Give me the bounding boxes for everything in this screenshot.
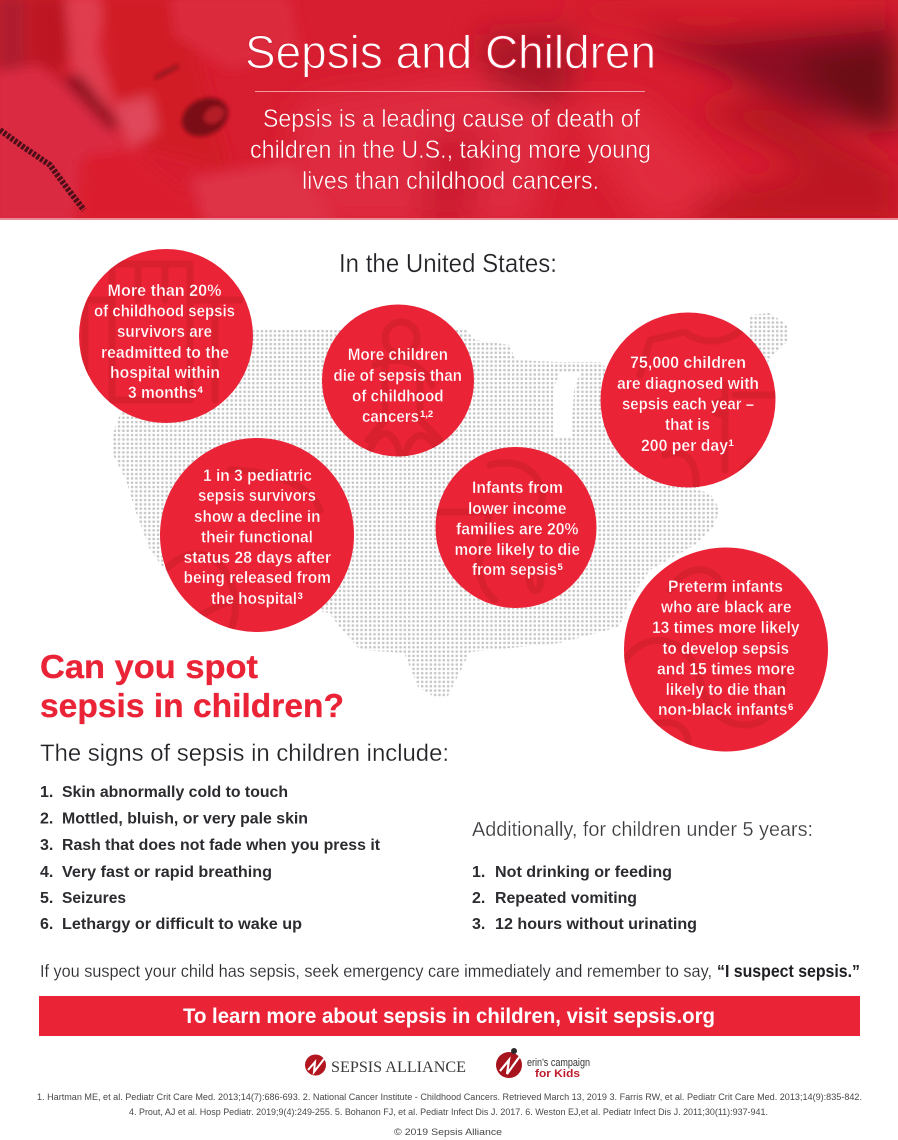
stat circle: preterm infants: 13 times more likely — [652, 619, 800, 637]
stat circle: functional decline: being released from — [184, 569, 331, 587]
references — [37, 1092, 862, 1117]
icon: onesie — [640, 325, 775, 495]
header subtitle: Sepsis is a leading cause of death of — [263, 105, 640, 133]
header subtitle: lives than childhood cancers. — [302, 167, 599, 195]
stat circle: diagnosed per year: sepsis each year – — [622, 396, 754, 414]
stat circle: low income infants: 5 — [558, 562, 564, 573]
list: under 5 years: 2. — [472, 890, 485, 907]
call to action banner: To learn more about sepsis in children, visit sepsis.org — [183, 1005, 715, 1028]
stat circle: diagnosed per year: 200 per day — [641, 437, 729, 455]
stat circle: functional decline — [160, 438, 354, 640]
stat circle: childhood cancers: of childhood — [352, 388, 444, 406]
stat circle: functional decline: show a decline in — [194, 508, 320, 526]
subheading: under 5 years: Additionally, for children under 5 years: — [472, 819, 813, 841]
list: signs of sepsis: Very fast or rapid breathing — [62, 864, 272, 881]
stat circle: low income infants: more likely to die — [454, 541, 580, 559]
emergency care note: If you suspect your child has sepsis, seek emergency care immediately and remember to say, — [40, 961, 712, 981]
heading: Can you spot sepsis in children — [40, 648, 344, 724]
list: signs of sepsis: 6. — [40, 916, 53, 933]
stat circle: readmitted — [79, 249, 253, 423]
subheading: signs of sepsis: The signs of sepsis in children include: — [40, 740, 449, 767]
stat circle: readmitted: 3 months — [128, 384, 197, 402]
heading: Can you spot sepsis in children: sepsis in children? — [40, 687, 344, 724]
stat circle: childhood cancers: die of sepsis than — [333, 367, 462, 385]
list: under 5 years: 12 hours without urinating — [495, 916, 697, 933]
header photo banner — [0, 0, 898, 225]
logo: Erin's Campaign for Kids: erin's campaign — [527, 1057, 590, 1069]
list: under 5 years: Not drinking or feeding — [495, 864, 672, 881]
stat circle: diagnosed per year: 1 — [728, 438, 734, 449]
logo: Erin's Campaign for Kids — [496, 1048, 590, 1080]
stat circle: readmitted: More than 20% — [108, 282, 222, 300]
stat circle: functional decline: sepsis survivors — [198, 487, 316, 505]
header subtitle: children in the U.S., taking more young — [250, 136, 651, 164]
list: signs of sepsis: Mottled, bluish, or very pale skin — [62, 810, 308, 828]
stat circle: readmitted: 4 — [198, 385, 204, 396]
heading: In the United States: In the United States: — [339, 248, 557, 278]
stat circle: preterm infants: 6 — [788, 702, 793, 713]
stat circle: preterm infants: non-black infants — [658, 701, 788, 719]
list: signs of sepsis: 3. — [40, 837, 53, 854]
stat circle: preterm infants: Preterm infants — [668, 578, 783, 596]
stat circle: childhood cancers: More children — [348, 346, 448, 364]
stat circle: low income infants: from sepsis — [472, 561, 557, 579]
list: signs of sepsis: 2. — [40, 810, 53, 828]
stat circle: functional decline: their functional — [201, 528, 313, 546]
list: signs of sepsis: Rash that does not fade when you press it — [62, 837, 381, 854]
icon: hospital — [80, 264, 240, 400]
stat circle: readmitted: survivors are — [117, 323, 212, 341]
stat circle: diagnosed per year: are diagnosed with — [617, 375, 759, 393]
icon: stethoscope — [625, 570, 783, 755]
list: under 5 years — [472, 864, 697, 933]
icon: stethoscope — [165, 470, 320, 640]
icon: child — [368, 322, 440, 455]
list: signs of sepsis: 1. — [40, 784, 53, 801]
stat circle: low income infants: families are 20% — [456, 520, 579, 538]
list: signs of sepsis: 4. — [40, 864, 53, 881]
list: signs of sepsis: Lethargy or difficult to wake up — [62, 916, 302, 933]
stat circle: childhood cancers: cancers — [362, 408, 419, 426]
copyright: © 2019 Sepsis Alliance — [394, 1127, 502, 1137]
logo: Erin's Campaign for Kids: for Kids — [535, 1068, 580, 1080]
dotted US map — [100, 305, 800, 705]
list: under 5 years: Repeated vomiting — [495, 890, 637, 907]
list: signs of sepsis: 5. — [40, 890, 53, 907]
heading: Can you spot sepsis in children: Can you spot — [40, 648, 258, 685]
stat circle: childhood cancers: 1,2 — [420, 409, 433, 420]
stat circle: childhood cancers — [322, 304, 474, 456]
logo: Sepsis Alliance: SEPSIS ALLIANCE — [331, 1059, 466, 1076]
emergency care note: “I suspect sepsis.” — [717, 961, 860, 981]
stat circle: functional decline: the hospital — [211, 590, 297, 608]
references: 1. Hartman ME, et al. Pediatr Crit Care Med. 2013;14(7):686-693. 2. National Cancer Institute - Childhood Cancers. Retrieved March 13, 2019 3. Farris RW, et al. Pediatr Crit Care Med. 2013;14(9):835-842. — [37, 1092, 862, 1102]
stat circle: preterm infants: who are black are — [660, 598, 792, 616]
call to action banner — [39, 996, 860, 1036]
stat circle: diagnosed per year: 75,000 children — [630, 354, 746, 372]
stat circle: functional decline: 1 in 3 pediatric — [203, 467, 312, 485]
stat circle: diagnosed per year: that is — [665, 416, 710, 434]
header subtitle — [250, 105, 651, 195]
stat circle: readmitted: hospital within — [110, 364, 220, 382]
stat circle: preterm infants: and 15 times more — [657, 660, 795, 678]
list: signs of sepsis: Skin abnormally cold to touch — [62, 784, 288, 801]
stat circle: diagnosed per year — [600, 312, 776, 495]
list: under 5 years: 1. — [472, 864, 485, 881]
stat circle: functional decline: status 28 days after — [184, 549, 332, 567]
stat circle: functional decline: 3 — [298, 591, 303, 602]
stat circle: readmitted: readmitted to the — [101, 344, 229, 362]
stat circle: preterm infants — [624, 548, 828, 755]
icon: stethoscope — [437, 463, 542, 600]
stat circle: readmitted: of childhood sepsis — [94, 302, 235, 320]
stat circle: low income infants: lower income — [468, 500, 566, 518]
logo: Sepsis Alliance — [305, 1054, 466, 1076]
list: signs of sepsis — [40, 784, 381, 933]
stat circle: low income infants — [436, 447, 596, 608]
stat circle: preterm infants: likely to die than — [666, 681, 786, 699]
stat circle: low income infants: Infants from — [472, 479, 563, 497]
references: 4. Prout, AJ et al. Hosp Pediatr. 2019;9(4):249-255. 5. Bohanon FJ, et al. Pediatr Infect Dis J. 2017. 6. Weston EJ,et al. Pediatr Infect Dis J. 2011;30(11):937-941. — [129, 1107, 768, 1117]
title: Sepsis and Children — [245, 26, 656, 78]
stat circle: preterm infants: to develop sepsis — [662, 640, 789, 658]
list: signs of sepsis: Seizures — [62, 890, 126, 907]
list: under 5 years: 3. — [472, 916, 485, 933]
